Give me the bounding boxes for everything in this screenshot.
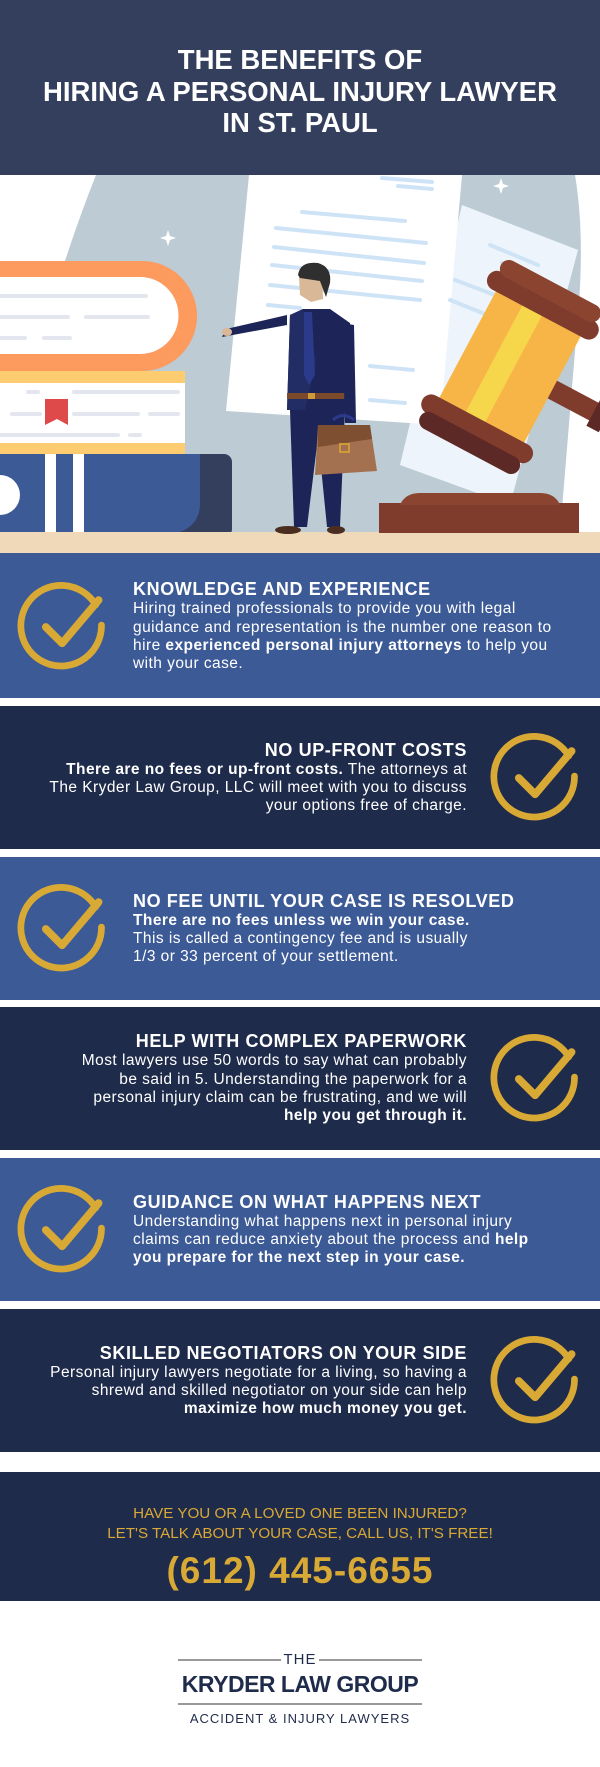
text: negotiators bbox=[50, 1343, 467, 1417]
call to action bbox=[0, 1472, 600, 1601]
icon: papers bbox=[226, 175, 578, 505]
text: no fee bbox=[133, 891, 514, 965]
text: knowledge: Hiring trained professionals to provide you with legal bbox=[133, 600, 516, 617]
text: no fee: This is called a contingency fee and is usually bbox=[133, 930, 468, 947]
panel: skilled negotiators bbox=[0, 1309, 600, 1452]
text: no up-front: The Kryder Law Group, LLC will meet with you to discuss bbox=[49, 779, 467, 796]
phone number: (612) 445-6655 bbox=[166, 1550, 434, 1591]
icon: lawyer man bbox=[222, 263, 377, 534]
logo: THE bbox=[284, 1651, 316, 1668]
header bbox=[0, 0, 600, 175]
icon: sparkles bbox=[160, 178, 509, 246]
text: guidance: you prepare for the next step in your case. bbox=[133, 1249, 465, 1266]
text: no fee: 1/3 or 33 percent of your settlement. bbox=[133, 948, 399, 965]
cta text: HAVE YOU OR A LOVED ONE BEEN INJURED? bbox=[133, 1505, 467, 1522]
text: guidance: GUIDANCE ON WHAT HAPPENS NEXT bbox=[133, 1192, 481, 1212]
panel: complex paperwork bbox=[0, 1007, 600, 1150]
text: negotiators: SKILLED NEGOTIATORS ON YOUR SIDE bbox=[100, 1343, 467, 1363]
logo: KRYDER LAW GROUP bbox=[182, 1671, 418, 1697]
logo: ACCIDENT & INJURY LAWYERS bbox=[190, 1711, 410, 1726]
floor bbox=[0, 532, 600, 553]
panel: no fee until resolved bbox=[0, 857, 600, 1000]
text: knowledge: with your case. bbox=[133, 655, 243, 672]
panel: knowledge and experience bbox=[0, 555, 600, 698]
title bbox=[43, 44, 557, 138]
icon: check circle bbox=[17, 884, 105, 972]
cta text: LET'S TALK ABOUT YOUR CASE, CALL US, IT'S FREE! bbox=[107, 1524, 493, 1542]
text: paperwork: HELP WITH COMPLEX PAPERWORK bbox=[136, 1031, 467, 1051]
text: negotiators: shrewd and skilled negotiator on your side can help bbox=[92, 1382, 467, 1399]
text: no fee: NO FEE UNTIL YOUR CASE IS RESOLVED bbox=[133, 891, 514, 911]
text: paperwork bbox=[82, 1031, 467, 1124]
cta text bbox=[107, 1505, 493, 1542]
text: knowledge: KNOWLEDGE AND EXPERIENCE bbox=[133, 579, 431, 599]
text: negotiators: maximize how much money you get. bbox=[184, 1400, 467, 1417]
text: no up-front bbox=[49, 740, 467, 814]
icon: check circle bbox=[490, 1034, 578, 1122]
panel: no up-front costs bbox=[0, 706, 600, 849]
title: IN ST. PAUL bbox=[222, 107, 378, 138]
icon: check circle bbox=[17, 1185, 105, 1272]
logo bbox=[178, 1651, 422, 1726]
text: knowledge bbox=[133, 579, 552, 672]
text: knowledge: hire experienced personal injury attorneys to help you bbox=[133, 637, 548, 654]
title: THE BENEFITS OF bbox=[178, 44, 422, 75]
text: no fee: There are no fees unless we win your case. bbox=[133, 912, 470, 929]
text: guidance bbox=[133, 1192, 529, 1266]
text: no up-front: NO UP-FRONT COSTS bbox=[265, 740, 467, 760]
panel: guidance bbox=[0, 1158, 600, 1301]
icon: check circle bbox=[17, 582, 105, 670]
text: paperwork: be said in 5. Understanding the paperwork for a bbox=[119, 1071, 467, 1088]
illustration bbox=[0, 175, 600, 555]
icon: check circle bbox=[490, 1336, 578, 1424]
icon: books bbox=[0, 261, 232, 537]
text: paperwork: Most lawyers use 50 words to say what can probably bbox=[82, 1052, 467, 1069]
text: negotiators: Personal injury lawyers negotiate for a living, so having a bbox=[50, 1364, 467, 1381]
text: guidance: Understanding what happens next in personal injury bbox=[133, 1213, 512, 1230]
text: paperwork: help you get through it. bbox=[284, 1107, 467, 1124]
text: paperwork: personal injury claim can be frustrating, and we will bbox=[93, 1089, 467, 1106]
text: no up-front: your options free of charge. bbox=[266, 797, 467, 814]
icon: check circle bbox=[490, 733, 578, 820]
title: HIRING A PERSONAL INJURY LAWYER bbox=[43, 76, 557, 106]
text: knowledge: guidance and representation is the number one reason to bbox=[133, 619, 552, 636]
text: no up-front: There are no fees or up-front costs. The attorneys at bbox=[66, 761, 467, 778]
icon: gavel bbox=[379, 254, 600, 533]
text: guidance: claims can reduce anxiety about the process and help bbox=[133, 1231, 529, 1248]
